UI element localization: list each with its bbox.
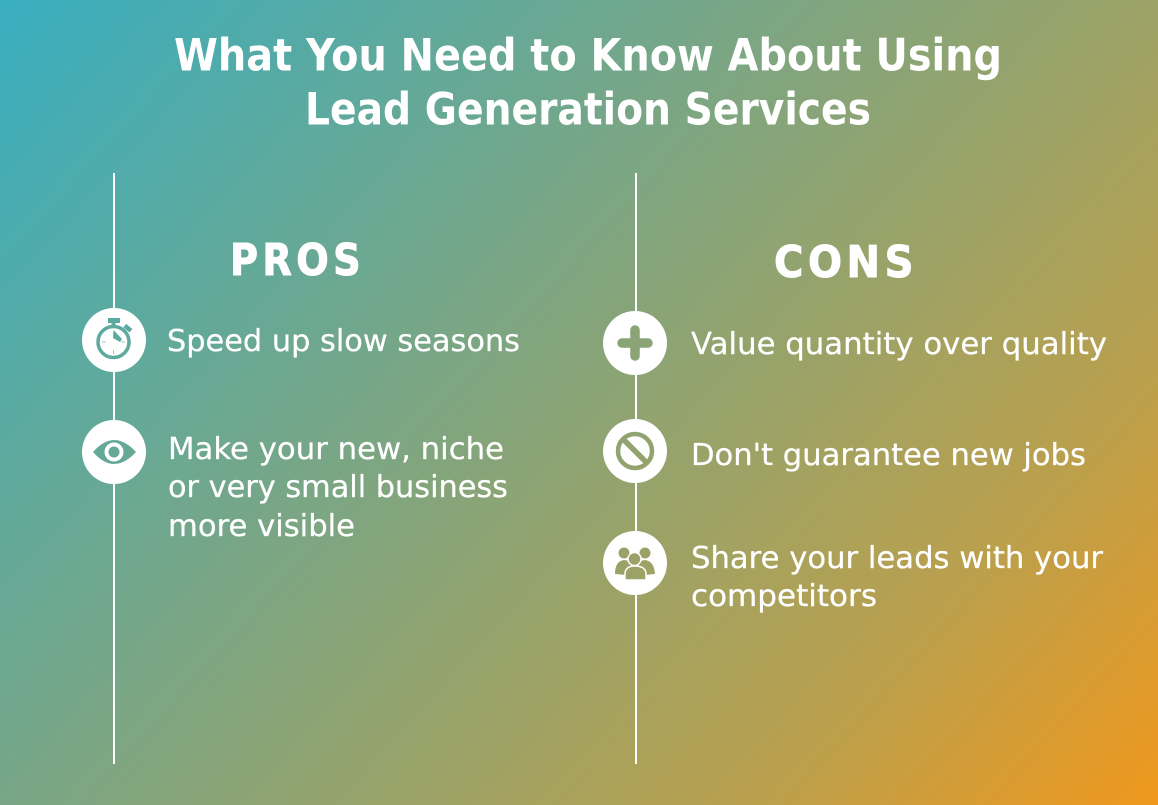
- icon: plus: [603, 311, 667, 375]
- pros heading: PROS: [230, 235, 365, 286]
- cons heading: CONS: [774, 237, 918, 288]
- title: [174, 30, 1002, 136]
- pros item: speed up slow seasons: Speed up slow seasons: [167, 324, 520, 359]
- pros timeline line: [113, 173, 115, 764]
- cons item: quantity over quality: Value quantity over quality: [691, 327, 1107, 362]
- icon: group of people: [603, 531, 667, 595]
- pros item: more visible: or very small business: [168, 470, 508, 505]
- pros item: more visible: more visible: [168, 509, 355, 544]
- cons item: shared leads: [691, 541, 1104, 614]
- title: What You Need to Know About Using: [174, 30, 1002, 82]
- pros item: more visible: [168, 432, 508, 544]
- icon: prohibited: [603, 419, 667, 483]
- pros item: more visible: Make your new, niche: [168, 432, 504, 467]
- cons timeline line: [635, 173, 637, 764]
- cons item: shared leads: Share your leads with your: [691, 541, 1104, 576]
- cons item: shared leads: competitors: [691, 579, 877, 614]
- panel: cons: [603, 173, 1107, 764]
- panel: pros: [82, 173, 520, 764]
- icon: eye: [82, 420, 146, 484]
- title: Lead Generation Services: [305, 84, 871, 136]
- icon: stopwatch: [82, 308, 146, 372]
- cons item: no guarantee: Don't guarantee new jobs: [691, 438, 1086, 473]
